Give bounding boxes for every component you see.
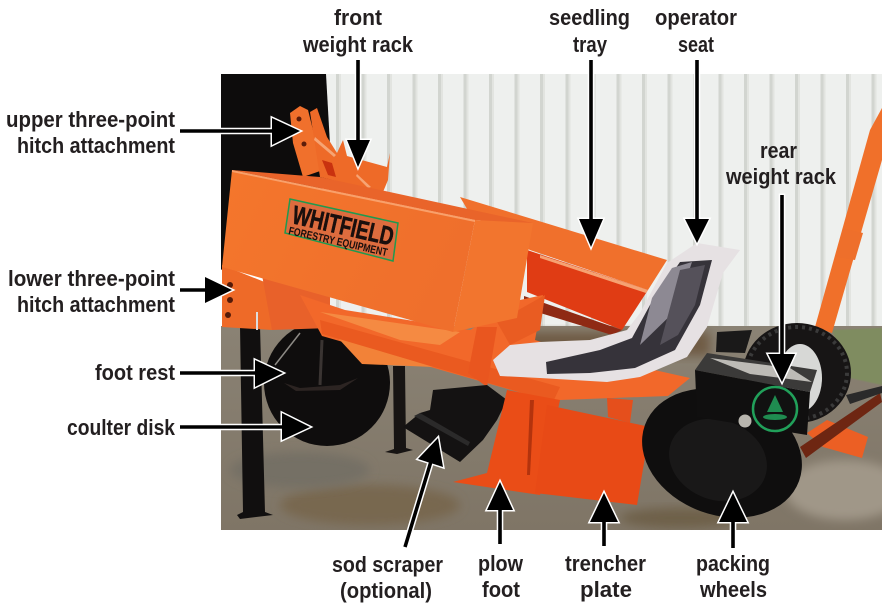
arrow: plow foot — [487, 482, 513, 544]
label: plow foot: foot — [482, 577, 521, 602]
seedling tray — [460, 197, 667, 335]
upper hitch and front weight rack — [290, 106, 390, 192]
label: packing wheels — [696, 551, 770, 602]
arrow: coulter disk — [180, 413, 310, 440]
arrow: front weight rack — [347, 60, 370, 167]
rear support post — [385, 366, 413, 454]
logo plate: WHITFIELD — [290, 200, 397, 251]
label: operator seat — [655, 5, 737, 57]
label: trencher plate — [565, 551, 646, 602]
main frame beam and foot plate — [300, 295, 690, 423]
label: seedling tray: seedling — [549, 5, 630, 30]
building wall — [325, 74, 882, 330]
arrow: sod scraper — [403, 438, 443, 548]
green emblem — [753, 387, 797, 431]
label: rear weight rack: rear — [760, 138, 797, 163]
arrow: lower three-point hitch — [180, 277, 232, 303]
label: plow foot: plow — [478, 551, 524, 576]
arrow: packing wheels — [719, 493, 747, 548]
rear hitch arms — [800, 386, 882, 458]
arrow: seedling tray — [579, 60, 603, 247]
wheel bolt — [738, 414, 752, 428]
arrow: trencher plate — [590, 493, 618, 546]
rear tire — [743, 323, 851, 423]
label: lower three-point hitch attachment: hitch attachment — [17, 292, 176, 317]
operator seat in plastic — [493, 243, 740, 382]
label: front weight rack: front — [334, 5, 383, 30]
label: sod scraper (optional): (optional) — [340, 578, 432, 603]
hitch block — [222, 265, 330, 330]
label: trencher plate: trencher — [565, 551, 646, 576]
logo plate: FORESTRY EQUIPMENT — [287, 225, 389, 259]
label: seedling tray — [549, 5, 630, 57]
label: sod scraper (optional) — [332, 552, 443, 603]
label: upper three-point hitch attachment: upper three-point — [6, 107, 176, 132]
label: operator seat: seat — [678, 32, 715, 57]
photo: planter machine — [221, 74, 882, 539]
dark doorway — [221, 74, 332, 270]
label: coulter disk: coulter disk — [67, 415, 176, 440]
rear weight rack box — [695, 330, 817, 435]
label: front weight rack — [302, 5, 414, 57]
arrow: upper three-point hitch — [180, 118, 300, 145]
front support post — [237, 326, 273, 519]
trencher plate and plow foot — [453, 390, 650, 505]
label: front weight rack: weight rack — [302, 32, 414, 57]
grass — [832, 328, 882, 385]
label: trencher plate: plate — [580, 577, 632, 602]
label: rear weight rack: weight rack — [725, 164, 837, 189]
tall rear pole — [815, 108, 882, 333]
foot rest bracket — [284, 378, 358, 391]
arrow: foot rest — [180, 360, 283, 387]
label: plow foot — [478, 551, 524, 602]
sod scraper — [403, 385, 507, 462]
label: lower three-point hitch attachment — [8, 266, 176, 317]
label: lower three-point hitch attachment: lower three-point — [8, 266, 176, 291]
label: sod scraper (optional): sod scraper — [332, 552, 443, 577]
ground — [221, 326, 882, 530]
label: upper three-point hitch attachment: hitch attachment — [17, 133, 176, 158]
label: operator seat: operator — [655, 5, 737, 30]
packing wheel — [642, 389, 802, 518]
label: rear weight rack — [725, 138, 837, 189]
coulter disk — [264, 320, 390, 446]
label: packing wheels: packing — [696, 551, 770, 576]
label: foot rest: foot rest — [95, 360, 176, 385]
arrow: rear weight rack — [768, 195, 795, 382]
label: seedling tray: tray — [573, 32, 608, 57]
main weight box with logo — [222, 170, 533, 332]
label: upper three-point hitch attachment — [6, 107, 176, 158]
arrow: operator seat — [685, 60, 709, 243]
label: packing wheels: wheels — [699, 577, 767, 602]
